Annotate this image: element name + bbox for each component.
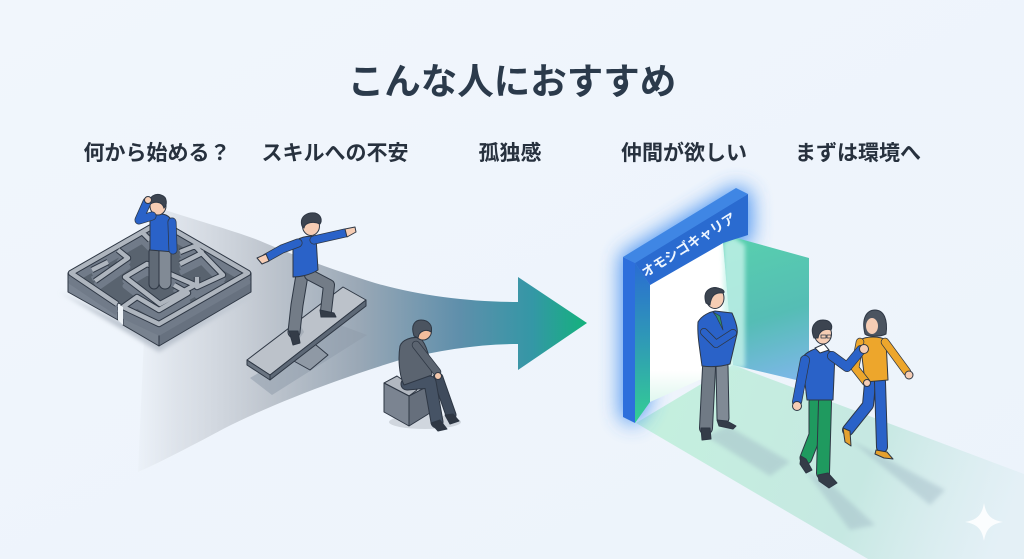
plank — [247, 287, 366, 375]
person: seated, head down — [399, 320, 459, 431]
gate sign text: オモシゴキャリア — [638, 209, 738, 280]
scene: maze with confused person — [60, 194, 258, 352]
gate header — [635, 194, 748, 285]
title: こんな人におすすめ — [348, 61, 676, 102]
label: isolation: 孤独感 — [478, 141, 542, 165]
cube — [384, 376, 417, 396]
fulcrum — [292, 340, 328, 370]
floor shadows — [706, 426, 945, 530]
door side glow — [723, 237, 745, 368]
labels row — [84, 141, 921, 165]
person: balancing — [257, 213, 356, 345]
person: hand on head — [139, 194, 174, 284]
gate top face — [623, 188, 748, 263]
seesaw shadow — [250, 325, 367, 395]
label: where to start: 何から始める？ — [84, 142, 230, 165]
label: environment first: まずは環境へ — [795, 142, 921, 165]
cube shadow — [389, 415, 461, 429]
scene: seesaw with balancing person — [247, 213, 367, 395]
open door panel — [723, 237, 809, 383]
maze shadow — [60, 292, 258, 352]
white opening — [650, 243, 733, 402]
portal glow — [620, 185, 752, 426]
gate outer side — [623, 257, 635, 423]
gate pillar — [635, 263, 650, 423]
portal: blue gate — [620, 185, 809, 426]
label: skill anxiety: スキルへの不安 — [262, 142, 408, 165]
person: woman walking in orange sweater — [843, 310, 913, 459]
glasses — [821, 335, 831, 338]
maze block — [68, 219, 251, 346]
arrow: gradient flow from left to right — [138, 205, 587, 472]
label: want peers: 仲間が欲しい — [621, 141, 747, 165]
person: standing with folded arms — [698, 288, 737, 440]
scene: person sitting on a cube — [384, 320, 461, 431]
floor: light spilling from portal — [636, 365, 1024, 559]
icon: sparkle watermark — [965, 503, 1003, 541]
person: man walking with glasses — [792, 320, 868, 488]
